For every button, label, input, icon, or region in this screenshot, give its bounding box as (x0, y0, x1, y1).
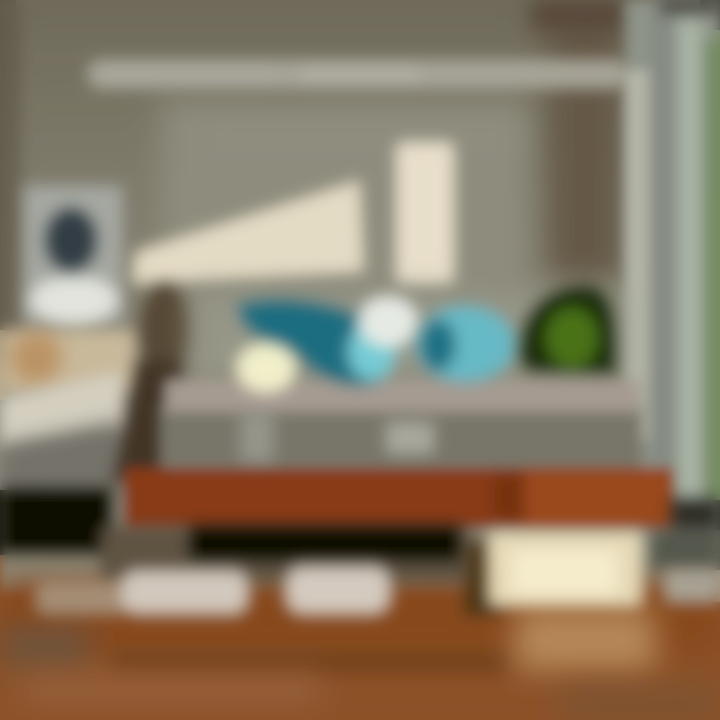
right-side reflection (650, 498, 720, 602)
cream box on the floor (488, 532, 642, 606)
subtitle: blurred secondary text (200, 128, 520, 152)
cushion: round cream (236, 343, 296, 393)
sofa seat (160, 380, 642, 470)
rug or books: white patches on floor (36, 566, 390, 614)
dark plant or lamp stem (112, 282, 191, 482)
side table with tan object (0, 330, 135, 392)
wooden floor (0, 580, 720, 720)
window frame (626, 0, 720, 530)
cushion: right teal (415, 306, 515, 382)
cushion: left teal (238, 300, 396, 385)
dark shadow under the sofa (0, 488, 112, 554)
framed wall art with dark circle (24, 186, 122, 324)
sofa back cushion (190, 290, 630, 380)
shadow beneath the sofa base (100, 526, 470, 582)
table leg (464, 540, 504, 616)
wooden sofa base (124, 468, 674, 528)
green potted plant (519, 286, 616, 374)
cushion: white centre (358, 296, 418, 348)
title: blurred heading band (88, 60, 628, 88)
sunlight patch on the wall (132, 142, 454, 284)
light sofa arm on the left (0, 372, 125, 495)
